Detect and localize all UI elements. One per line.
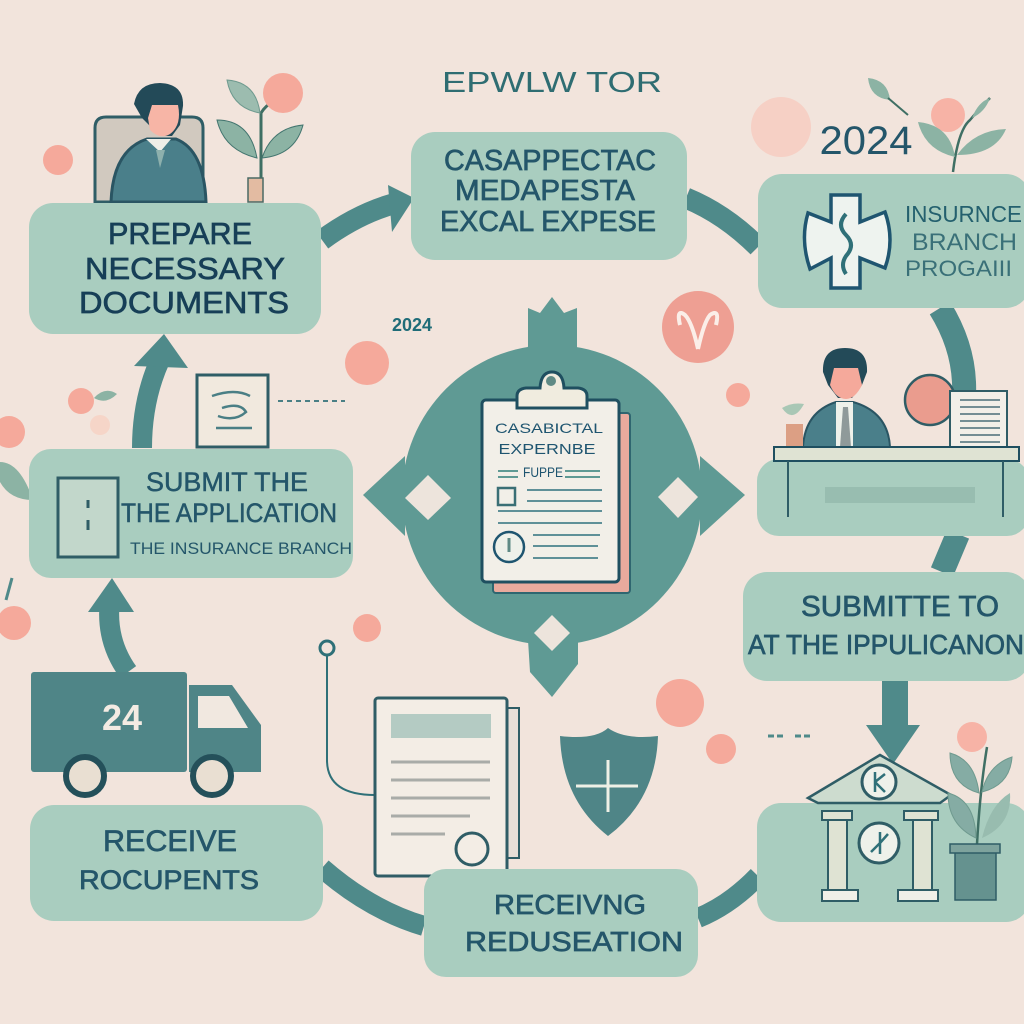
- panel: prepare necessary documents: PREPARE: [108, 216, 252, 251]
- icon: bank building: [808, 755, 951, 901]
- panel: receiving reduseation: RECEIVNG: [494, 889, 646, 920]
- icon: plant top left: [217, 73, 303, 202]
- panel: bank: [757, 803, 1024, 922]
- panel: top center: MEDAPESTA: [455, 175, 636, 207]
- panel: insurance branch program: [758, 174, 1024, 308]
- flower: [43, 145, 73, 175]
- panel: prepare necessary documents: NECESSARY: [85, 251, 285, 286]
- panel: submitte to: SUBMITTE TO: [801, 591, 999, 623]
- panel: prepare necessary documents: DOCUMENTS: [79, 285, 289, 320]
- icon: document upper left: [197, 375, 268, 447]
- icon: plant bottom right: [948, 722, 1012, 900]
- panel: submit the application: [29, 449, 353, 578]
- arrow: bottom right: [698, 876, 758, 918]
- panel: insurance branch program: BRANCH: [912, 229, 1017, 256]
- arrow: right upper: [940, 308, 964, 395]
- panel: insurance branch program: PROGAIII: [905, 256, 1012, 281]
- arrow: bottom left: [322, 868, 424, 926]
- icon: person at top left: [95, 83, 206, 202]
- arrow: top right: [686, 198, 758, 247]
- small label: 2024 center: 2024: [392, 315, 432, 335]
- panel: receive rocupents: RECEIVE: [103, 825, 237, 858]
- panel: receiving reduseation: REDUSEATION: [465, 926, 683, 957]
- flower: [656, 679, 704, 727]
- small marks: [768, 734, 812, 738]
- panel: prepare necessary documents: [29, 203, 321, 334]
- flower: [353, 614, 381, 642]
- panel: top center: EXCAL EXPESE: [440, 206, 656, 238]
- flower left edge: [0, 416, 33, 500]
- flower: [726, 383, 750, 407]
- arrow: right middle: [942, 534, 958, 572]
- central badge: [363, 297, 745, 697]
- panel: top center: CASAPPECTAC: [444, 145, 656, 177]
- icon: shield: [560, 728, 658, 836]
- panel: submit the application: SUBMIT THE: [146, 467, 308, 497]
- icon: plant top right: [751, 78, 1006, 172]
- icon: document bottom center: [375, 698, 519, 876]
- panel: submit the application: THE APPLICATION: [121, 498, 337, 528]
- panel: receive rocupents: ROCUPENTS: [79, 865, 259, 895]
- connector with node: [320, 641, 375, 795]
- panel: top center: [411, 132, 687, 260]
- panel: submitte to: [743, 572, 1024, 681]
- icon: clerk at desk: [774, 348, 1019, 517]
- panel: desk: [757, 459, 1024, 536]
- arrow: up to documents: [134, 334, 188, 448]
- heading: 2024 top right: 2024: [820, 119, 912, 163]
- panel: submit the application: THE INSURANCE BRANCH: [130, 539, 352, 558]
- flower left: [68, 388, 117, 435]
- arrow: down to bank: [866, 680, 920, 764]
- connector: [278, 400, 345, 402]
- icon: clipboard: FUPPE: [523, 464, 563, 480]
- panel: receive rocupents: [30, 805, 323, 921]
- arrow: top left: [322, 185, 414, 240]
- flower left: [0, 578, 31, 640]
- icon: clipboard: EXPERNBE: [498, 441, 596, 458]
- arrow: up from truck: [88, 578, 134, 672]
- icon: truck: 24: [102, 697, 142, 738]
- icon: truck: [31, 672, 261, 795]
- title: EPWLW TOR: [442, 67, 662, 99]
- icon: clipboard: [482, 372, 630, 593]
- flower: [706, 734, 736, 764]
- panel: insurance branch program: INSURNCE: [905, 201, 1022, 227]
- flower: [345, 341, 389, 385]
- icon: aries badge: [662, 291, 734, 363]
- panel: receiving reduseation: [424, 869, 698, 977]
- icon: clipboard: CASABICTAL: [495, 420, 603, 436]
